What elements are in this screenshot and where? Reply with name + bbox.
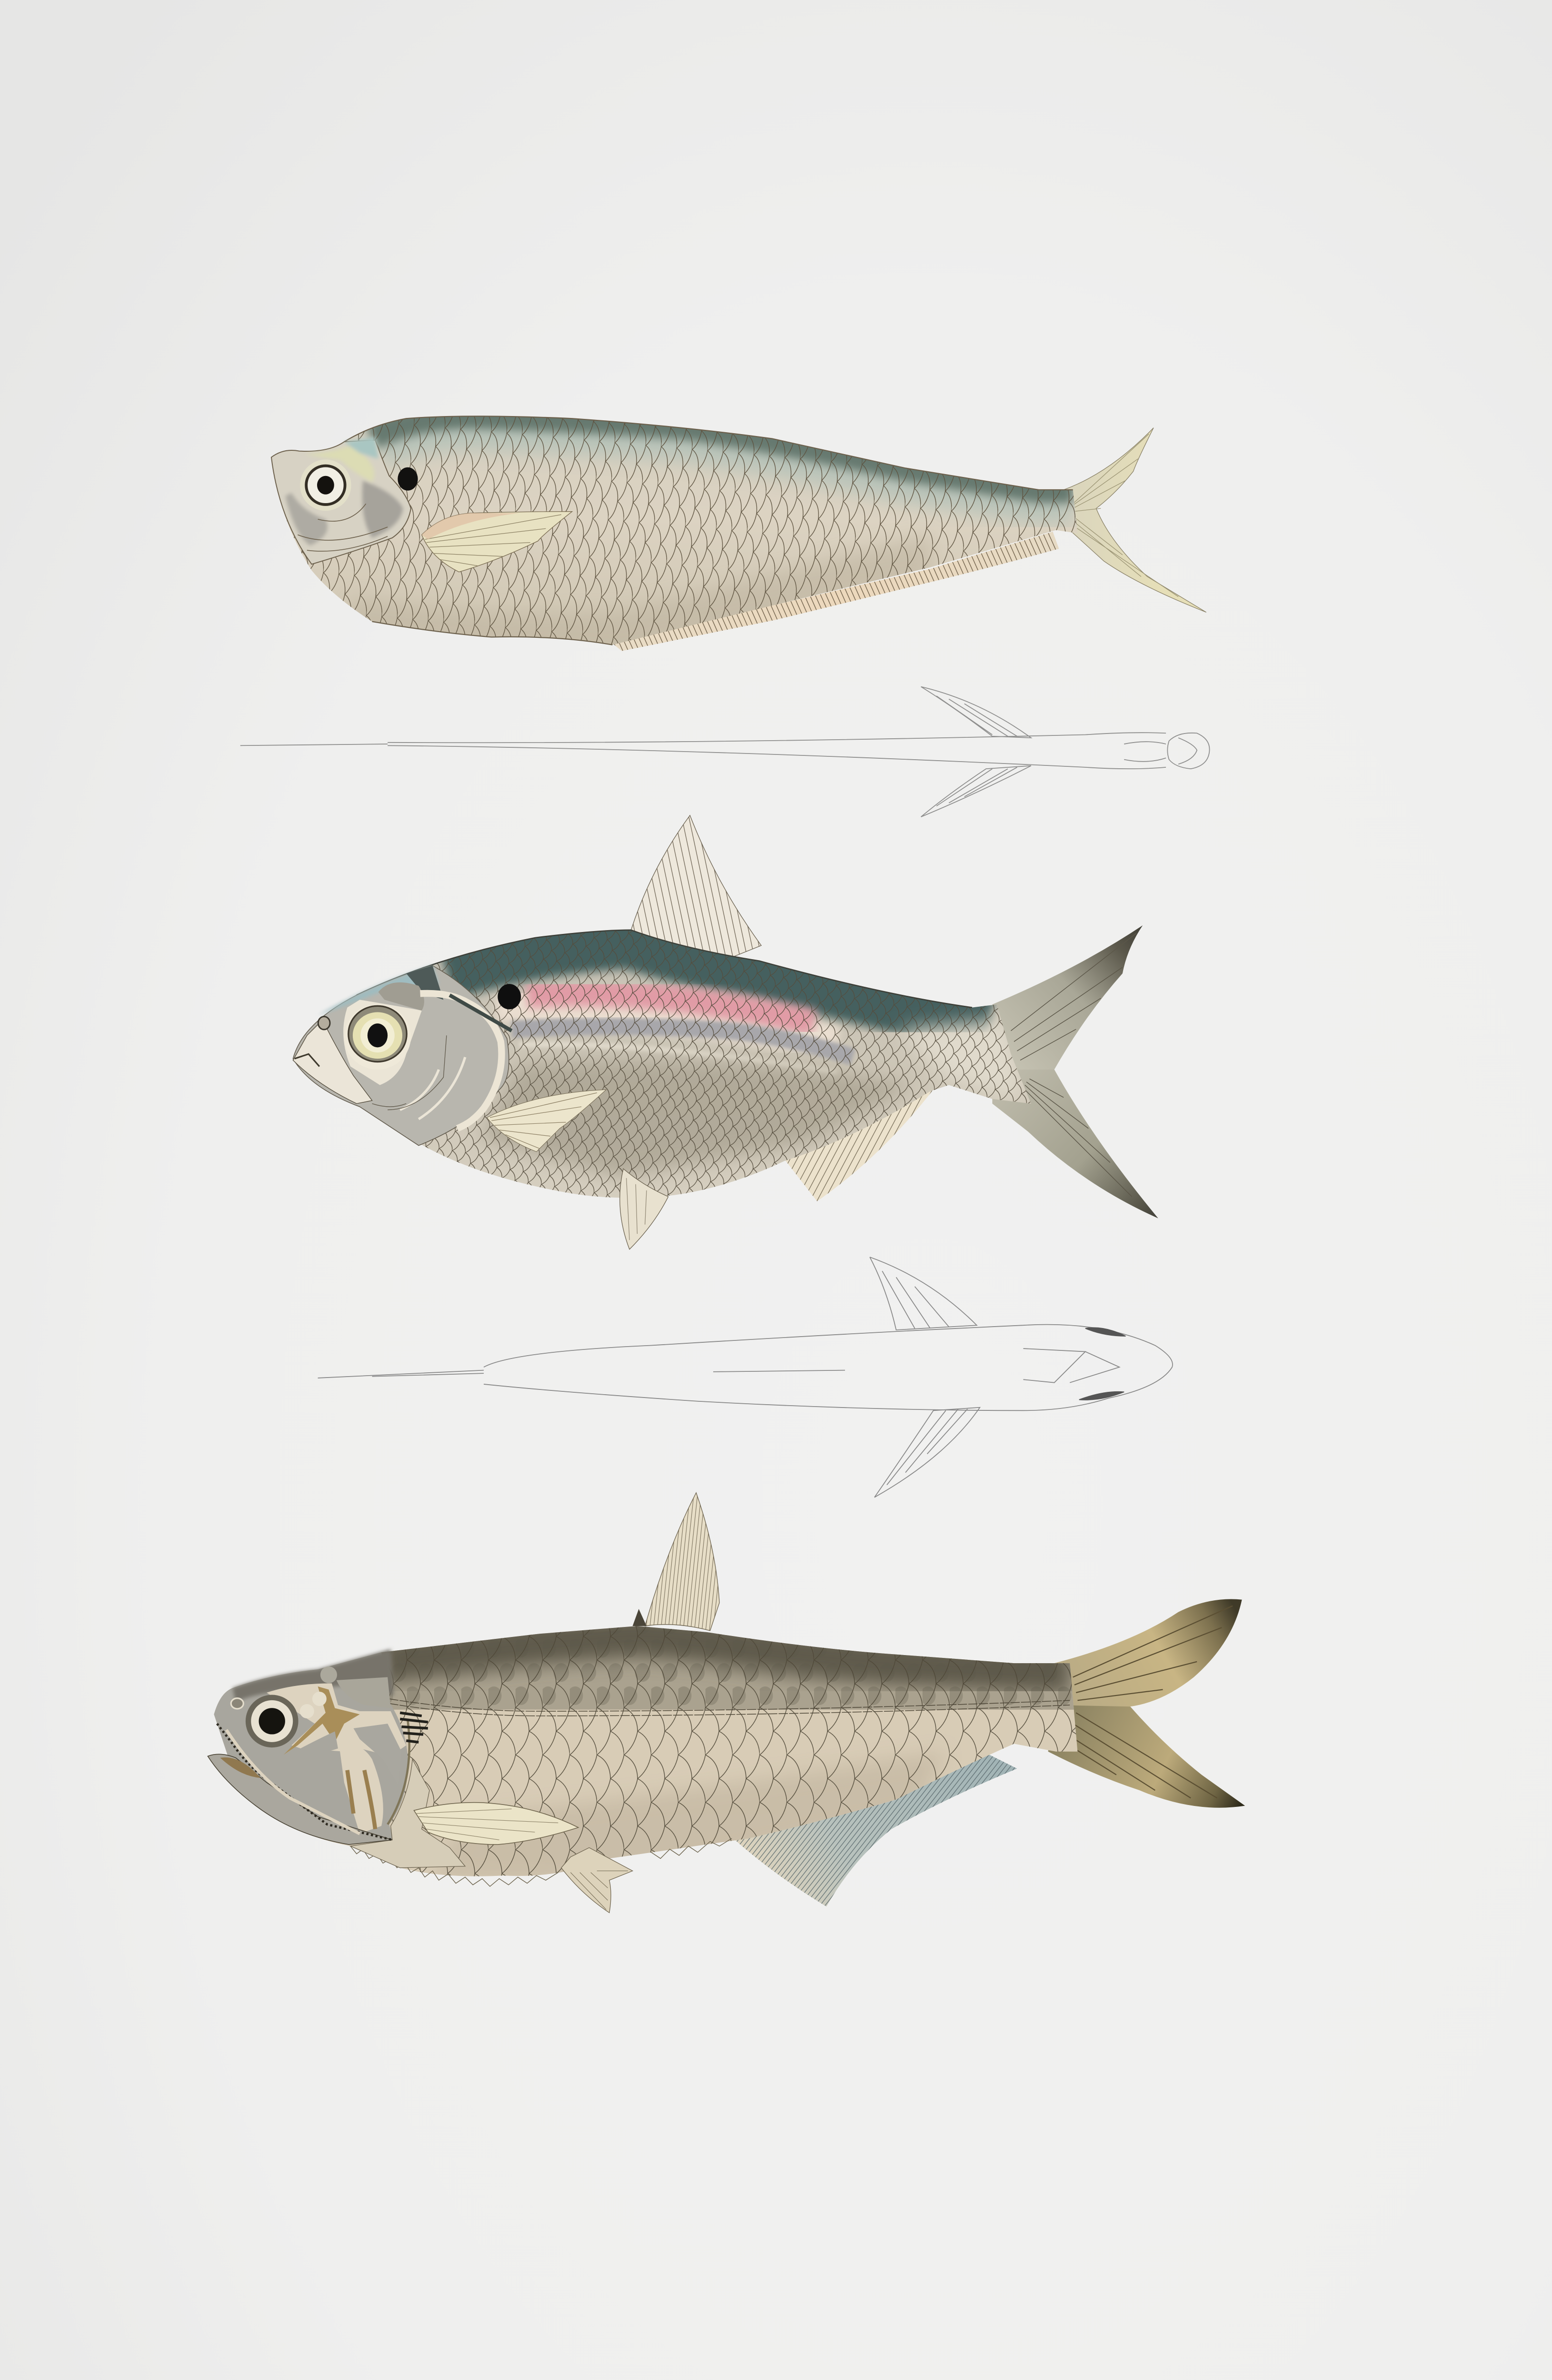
anal fin 5 — [735, 1750, 1017, 1906]
humeral spot 3 — [497, 984, 521, 1010]
ventral fin 3 — [620, 1169, 668, 1250]
opercle and throat 5 — [350, 1759, 465, 1868]
head 5 — [208, 1649, 465, 1868]
belly serrations 5 — [350, 1838, 732, 1886]
body 1 — [284, 416, 1077, 645]
ventral fin 5 — [561, 1848, 633, 1913]
upper fin 2 — [921, 687, 1031, 738]
head 1 — [271, 437, 411, 564]
gray patch behind head 5 — [337, 1677, 391, 1708]
pectoral fin 1 — [422, 512, 572, 572]
cream and brown facial bones 5 — [267, 1683, 406, 1756]
head 3 — [293, 966, 512, 1145]
humeral spot 1 — [398, 467, 418, 491]
eyes 4 — [1079, 1328, 1125, 1400]
fish 1: side view, long anal fin — [270, 416, 1206, 651]
anal fin 1 — [612, 532, 1059, 651]
tail fin 1 — [1064, 428, 1206, 612]
eye 1 — [300, 460, 351, 511]
gill rakers 5 — [400, 1713, 428, 1742]
eye 5 — [246, 1695, 298, 1747]
upper fin 4 — [870, 1257, 977, 1330]
head ring 2 — [1167, 733, 1210, 769]
dorsal fin 5 — [633, 1493, 719, 1631]
fish 4: top outline view — [318, 1257, 1173, 1497]
lower fin 2 — [921, 766, 1031, 817]
body 5 — [208, 1612, 1085, 1891]
fish 5: side view, large mouth — [208, 1493, 1245, 1913]
tail fin 5 — [1048, 1599, 1245, 1808]
dorsal fin 3 — [631, 815, 761, 958]
tail fin 3 — [992, 925, 1158, 1219]
tail filament 4 — [318, 1370, 484, 1378]
pectoral fin 3 — [487, 1090, 606, 1151]
body outline 2 — [388, 733, 1166, 769]
eye 3 — [344, 1004, 411, 1070]
body outline 4 — [484, 1325, 1173, 1410]
pectoral fin 5 — [414, 1803, 578, 1844]
fish 2: top outline view — [240, 687, 1210, 817]
lower fin 4 — [875, 1408, 980, 1497]
body 3 — [356, 929, 1031, 1198]
fish 3: side view, pink flank — [293, 815, 1158, 1250]
anal fin 3 — [785, 1083, 938, 1201]
lateral line 5 — [389, 1699, 1070, 1716]
tail filament 2 — [240, 744, 388, 745]
mouth 5 — [208, 1754, 392, 1844]
